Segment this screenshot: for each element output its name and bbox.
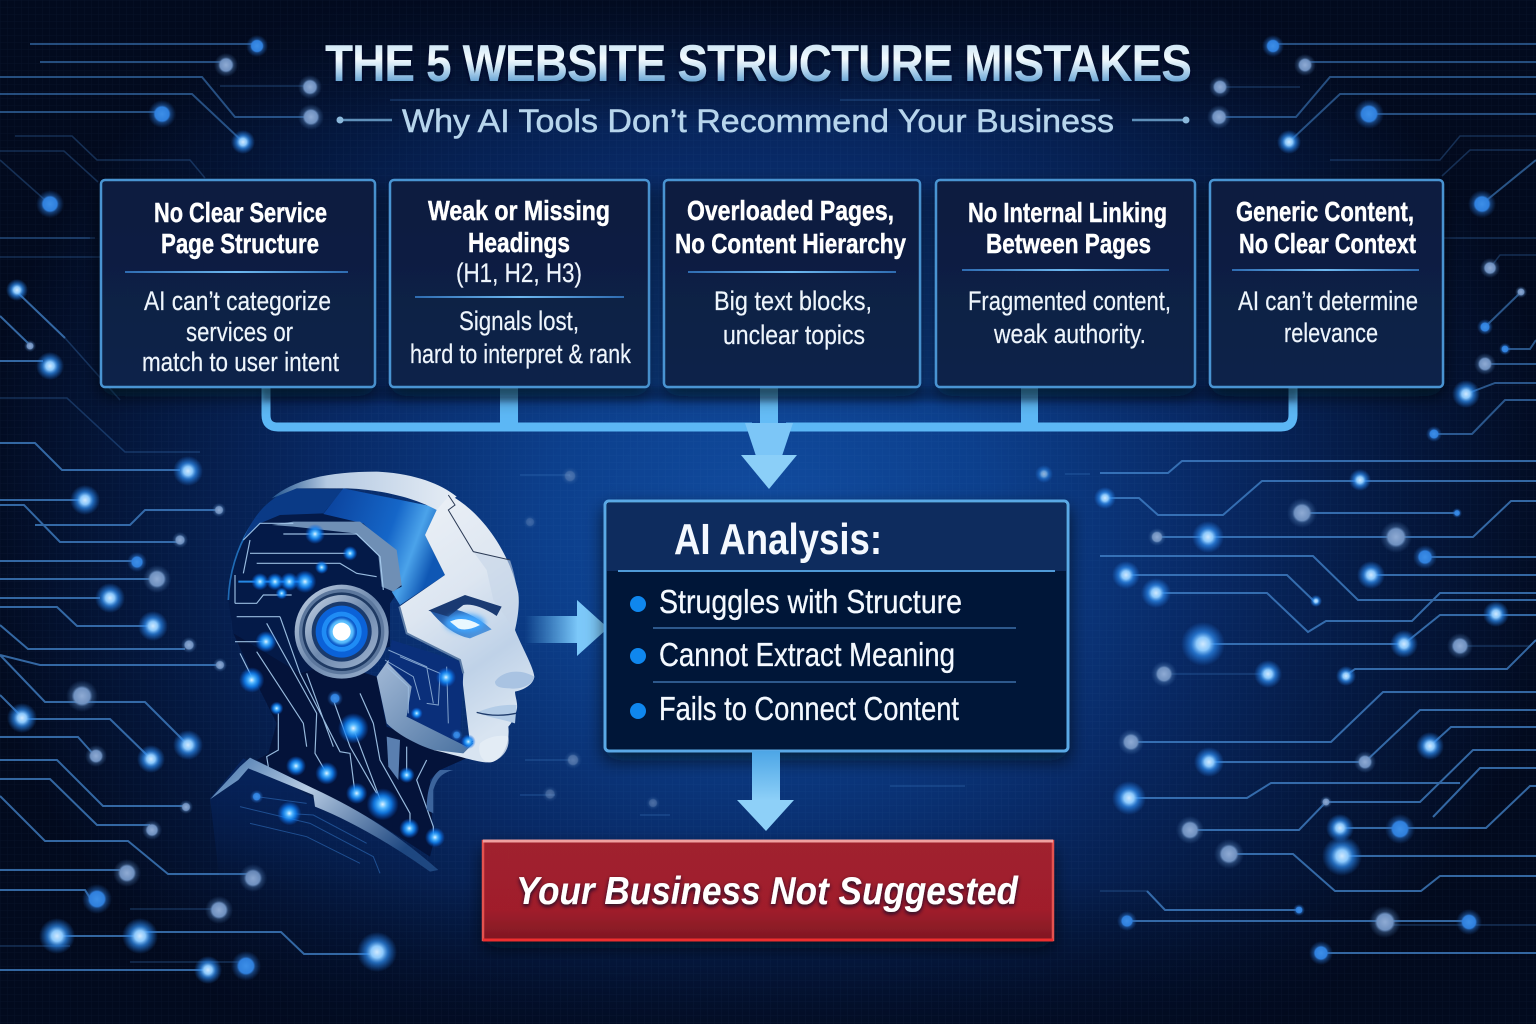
- heading: [675, 195, 906, 259]
- heading: Between Pages: [986, 228, 1151, 259]
- circuit traces: left: [0, 238, 397, 984]
- illustration: robot head: [210, 472, 534, 883]
- panel: weak or missing headings: [390, 180, 649, 387]
- heading: [968, 197, 1167, 259]
- description: [142, 286, 339, 377]
- sub-element: collar: [210, 758, 438, 872]
- description: [968, 286, 1171, 349]
- heading: No Clear Service: [154, 197, 327, 228]
- description: Fragmented content,: [968, 286, 1171, 316]
- heading: Overloaded Pages,: [687, 195, 894, 226]
- sub-element: glowing nodes: [239, 524, 476, 847]
- heading: [154, 197, 327, 259]
- callout: your business not suggested: Your Business Not Suggested: [516, 870, 1019, 913]
- connector: panels to analysis: [262, 387, 1298, 456]
- description: relevance: [1284, 318, 1378, 348]
- description: [714, 286, 872, 350]
- description: weak authority.: [993, 319, 1146, 349]
- panel: no internal linking: [936, 180, 1195, 387]
- circuit traces: right: [1094, 461, 1536, 965]
- arrow: analysis to result: [737, 751, 794, 831]
- list item: fails to connect content: Fails to Connect Content: [659, 690, 959, 727]
- sub-element: ear disc: [295, 585, 389, 679]
- arrow: robot to analysis: [525, 600, 608, 656]
- heading: Headings: [468, 227, 570, 258]
- sub-element: neck circuits: [257, 617, 453, 837]
- heading: Generic Content,: [1236, 196, 1414, 227]
- title: THE 5 WEBSITE STRUCTURE MISTAKES: [325, 36, 1192, 93]
- panel: no clear service page structure: [101, 180, 375, 387]
- description: Big text blocks,: [714, 286, 872, 316]
- circuit traces: top left: [0, 35, 324, 257]
- description: AI can’t determine: [1238, 286, 1418, 316]
- heading: [1236, 196, 1416, 259]
- description: AI can’t categorize: [144, 286, 331, 316]
- sub-element: head circuits: [235, 523, 383, 680]
- description: [410, 306, 631, 369]
- heading: [428, 195, 610, 288]
- description: [1238, 286, 1418, 348]
- list item: struggles with structure: Struggles with Structure: [659, 583, 962, 620]
- panel: ai analysis: [605, 501, 1068, 751]
- description: Signals lost,: [459, 306, 579, 336]
- heading: Page Structure: [161, 228, 319, 259]
- callout: your business not suggested: [483, 841, 1053, 940]
- heading: (H1, H2, H3): [456, 258, 582, 288]
- circuit traces: faint centre: [390, 100, 1100, 815]
- description: services or: [186, 317, 293, 347]
- heading: AI Analysis:: [674, 515, 882, 564]
- panel: overloaded pages: [664, 180, 920, 387]
- heading: No Content Hierarchy: [675, 228, 906, 259]
- subtitle: Why AI Tools Don’t Recommend Your Business: [402, 103, 1114, 139]
- arrow: down into analysis: [741, 455, 797, 489]
- description: unclear topics: [723, 320, 865, 350]
- sub-element: shoulder circuits: [240, 797, 380, 873]
- panel: generic content: [1210, 180, 1443, 387]
- description: match to user intent: [142, 347, 339, 377]
- heading: No Internal Linking: [968, 197, 1167, 228]
- circuit traces: top right: [1207, 35, 1536, 442]
- heading: Weak or Missing: [428, 195, 610, 226]
- list item: cannot extract meaning: Cannot Extract Meaning: [659, 636, 955, 673]
- heading: No Clear Context: [1239, 228, 1416, 259]
- description: hard to interpret & rank: [410, 339, 631, 369]
